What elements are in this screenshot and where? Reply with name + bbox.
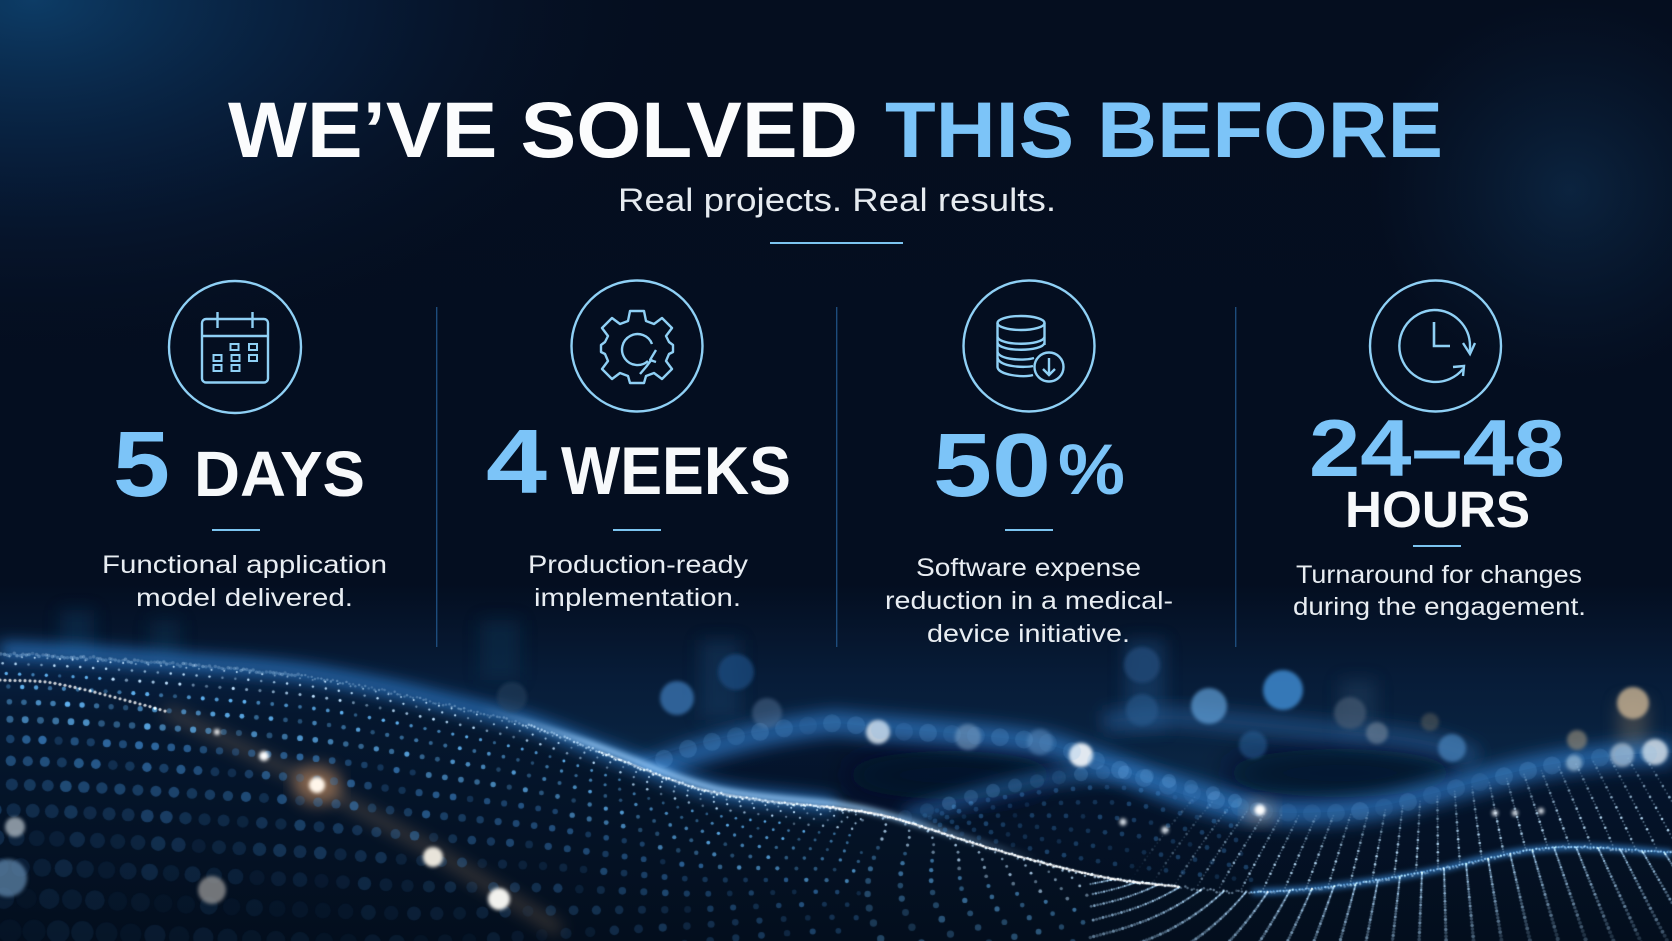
front ridge glow <box>0 650 836 806</box>
panel: 5 days <box>102 281 387 612</box>
icon: calendar <box>169 281 301 413</box>
icon: clock with arrows <box>1370 280 1501 412</box>
warm streak across the mesh <box>165 710 560 930</box>
description: Software expense <box>916 554 1141 582</box>
description: Production-ready <box>528 551 749 579</box>
stat value: 4 weeks: WEEKS <box>561 433 791 509</box>
stat rule <box>212 529 260 531</box>
description <box>102 551 387 612</box>
stat value: 4 weeks <box>486 412 791 513</box>
subtitle: Real projects. Real results. <box>618 182 1056 218</box>
bokeh lights <box>497 647 1668 771</box>
description: implementation. <box>534 584 741 612</box>
stat value: 50%: % <box>1058 431 1125 510</box>
description: model delivered. <box>136 584 353 612</box>
stat value: 4 weeks: 4 <box>486 412 547 513</box>
panel: 24-48 hours <box>1293 280 1586 621</box>
stat rule <box>1005 529 1053 531</box>
dark lobes behind the ridges <box>845 749 1455 799</box>
description <box>885 554 1173 648</box>
stat value: 50%: 50 <box>933 416 1051 516</box>
divider 1 <box>436 307 437 647</box>
faint bokeh columns behind the waves <box>60 610 1648 760</box>
stat value: 5 days: DAYS <box>194 438 365 510</box>
divider 3 <box>1235 307 1236 647</box>
panel: 4 weeks <box>486 280 791 612</box>
stat rule <box>1413 545 1461 547</box>
middle wave glow <box>560 723 1672 820</box>
icon: gear <box>572 280 702 412</box>
description: during the engagement. <box>1293 593 1586 621</box>
stat value: 50% <box>933 416 1125 516</box>
description: Functional application <box>102 551 387 579</box>
stat rule <box>613 529 661 531</box>
stat value: 24-48: 24–48 <box>1309 404 1565 494</box>
mid surface <box>620 723 1672 941</box>
description: device initiative. <box>927 620 1130 648</box>
description <box>1293 561 1586 621</box>
stat value: 5 days <box>113 412 365 516</box>
front surface <box>0 653 1672 941</box>
heading rule <box>770 242 903 244</box>
icon: database with download <box>964 280 1094 412</box>
title: THIS BEFORE <box>885 85 1443 174</box>
description <box>528 551 749 612</box>
panel: 50% <box>885 280 1173 648</box>
stat value: 5 days: 5 <box>113 412 170 516</box>
description: reduction in a medical- <box>885 587 1173 615</box>
title <box>228 85 1443 174</box>
divider 2 <box>836 307 837 647</box>
title: WE’VE SOLVED <box>228 85 858 174</box>
stat unit: hours: HOURS <box>1345 481 1530 538</box>
description: Turnaround for changes <box>1296 561 1582 589</box>
back wave glow <box>1103 717 1476 760</box>
